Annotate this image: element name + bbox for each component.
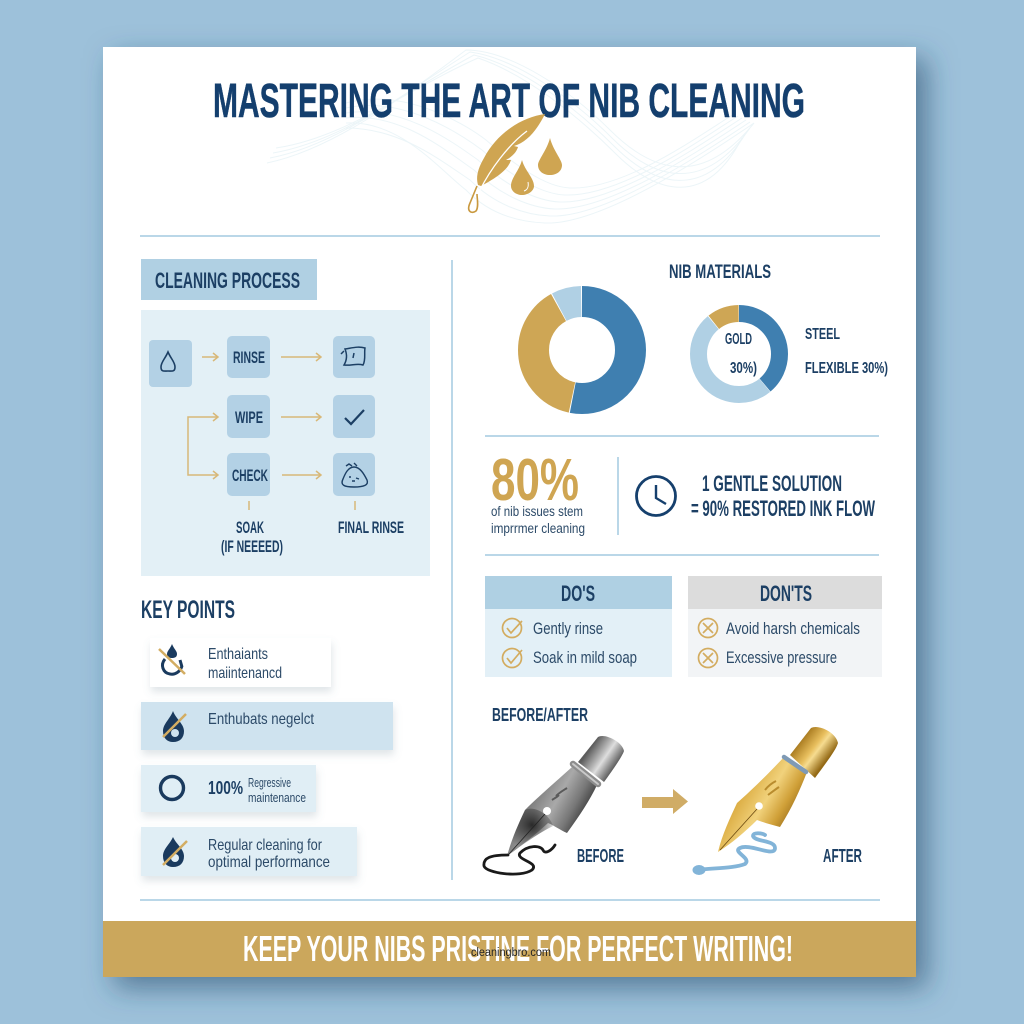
icons: gold checks xyxy=(502,618,522,668)
stat: gentle solution: = 90% RESTORED INK FLOW xyxy=(691,496,875,521)
icon: check mark xyxy=(345,410,364,424)
flow arrows xyxy=(188,353,355,510)
step labels: SOAK xyxy=(236,519,264,537)
labels: before and after: AFTER xyxy=(823,846,862,866)
text: optimal performance xyxy=(208,854,330,871)
heading: key points: KEY POINTS xyxy=(141,596,235,624)
text xyxy=(208,837,330,871)
key point 2 xyxy=(141,702,393,750)
footer banner xyxy=(103,921,916,977)
list text: Avoid harsh chemicals xyxy=(726,619,860,638)
chart labels: GOLD xyxy=(725,331,752,348)
heading: cleaning process: CLEANING PROCESS xyxy=(155,268,300,293)
text: maintenance xyxy=(248,791,306,805)
icon: gold feather and drops xyxy=(469,114,562,212)
icons: gold crosses xyxy=(698,618,718,668)
main card xyxy=(103,47,916,977)
heading: cleaning process xyxy=(141,259,317,300)
icon: crossed drop xyxy=(163,837,187,867)
key point 3 xyxy=(141,765,316,812)
stat: gentle solution: 1 GENTLE SOLUTION xyxy=(702,471,842,496)
labels: before and after: BEFORE xyxy=(577,846,624,866)
panel: don'ts xyxy=(688,576,882,677)
list text xyxy=(533,619,637,667)
watermark: cleaningbro.com xyxy=(471,947,551,959)
list text xyxy=(726,619,860,667)
chart labels xyxy=(725,326,888,377)
step labels: WIPE xyxy=(235,409,263,427)
list text: Excessive pressure xyxy=(726,648,837,667)
text: Enthubats negelct xyxy=(208,711,314,728)
illustration: clean gold nib xyxy=(692,727,838,875)
icon: cloth xyxy=(341,347,365,365)
step labels: RINSE xyxy=(233,349,265,367)
panel: do's: DO'S xyxy=(561,581,595,606)
icon: crossed drop xyxy=(163,711,186,742)
text: Regular cleaning for xyxy=(208,837,323,854)
icon: water drop xyxy=(161,352,175,371)
stat: 80%: 80% xyxy=(491,447,579,513)
chart labels: FLEXIBLE 30%) xyxy=(805,360,888,377)
step boxes xyxy=(149,336,375,496)
text xyxy=(208,646,282,682)
illustration: dirty steel nib xyxy=(484,736,624,874)
step labels: CHECK xyxy=(232,467,268,485)
stat: 80% xyxy=(491,447,585,536)
step labels xyxy=(221,349,404,556)
icon: crossed drop xyxy=(159,644,185,674)
key point 1 xyxy=(150,638,331,687)
icon: ring xyxy=(160,776,184,800)
text: 100% xyxy=(208,778,243,798)
list text: Gently rinse xyxy=(533,619,603,638)
panel: cleaning process flow xyxy=(141,310,430,576)
text: Enthaiants xyxy=(208,646,268,663)
text xyxy=(208,776,306,805)
stat: 80%: of nib issues stem xyxy=(491,504,583,519)
chart labels: 30%) xyxy=(730,360,757,377)
icon: clock xyxy=(636,476,676,516)
icon: soap blob xyxy=(342,463,367,487)
heading: nib materials: NIB MATERIALS xyxy=(669,262,771,283)
chart: large donut xyxy=(534,302,630,398)
stat: gentle solution xyxy=(691,471,875,521)
stat: 80%: imprrmer cleaning xyxy=(491,521,585,536)
panel: do's xyxy=(485,576,672,677)
list text: Soak in mild soap xyxy=(533,648,637,667)
arrow: before to after xyxy=(642,789,688,814)
key point 4 xyxy=(141,827,357,876)
text: Regressive xyxy=(248,776,291,790)
chart: small donut xyxy=(698,314,780,394)
step labels: (IF NEEEED) xyxy=(221,538,283,556)
chart labels: STEEL xyxy=(805,326,840,343)
panel: don'ts: DON'TS xyxy=(760,581,812,606)
labels: before and after xyxy=(577,846,862,866)
text: maiintenancd xyxy=(208,665,282,682)
step labels: FINAL RINSE xyxy=(338,519,404,537)
decorative wave lines xyxy=(267,50,754,223)
heading: before/after: BEFORE/AFTER xyxy=(492,705,588,725)
